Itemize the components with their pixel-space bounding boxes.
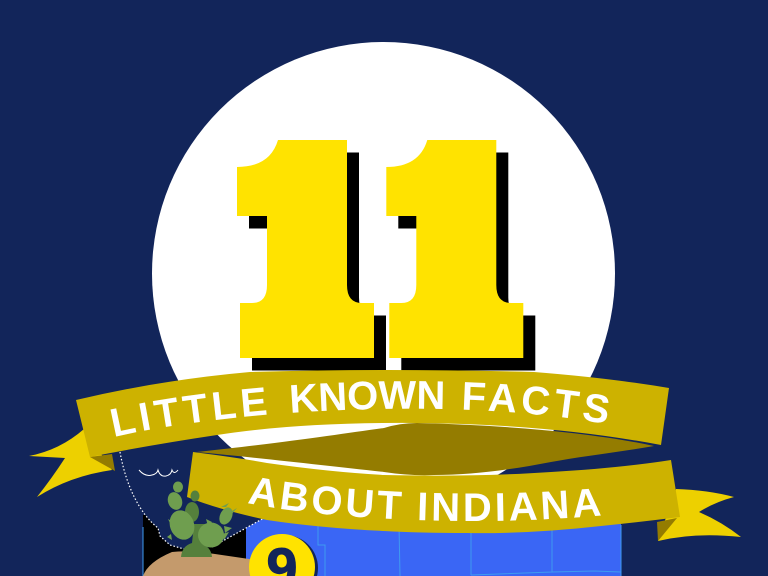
white circle xyxy=(152,42,615,505)
dark ribbon fold between banners xyxy=(197,423,654,475)
banner heading: LITTLE xyxy=(110,387,267,436)
tail shape xyxy=(658,489,741,541)
water waves xyxy=(139,470,178,476)
banner heading xyxy=(248,478,601,521)
first digit 1 shadow xyxy=(249,152,386,370)
second digit 1 xyxy=(386,140,523,358)
first digit 1 xyxy=(237,140,374,358)
map blue fill xyxy=(246,500,621,576)
cactus pad upper right xyxy=(217,505,235,527)
lake navy area xyxy=(120,440,264,549)
cactus spines xyxy=(167,497,237,540)
tail fold xyxy=(657,518,677,541)
dotted shoreline xyxy=(120,452,264,549)
cactus trunk and base xyxy=(181,524,212,557)
banner heading: INDIANA xyxy=(419,488,601,521)
cactus pad upper centre xyxy=(185,502,199,522)
black map region xyxy=(143,515,246,576)
tail fold xyxy=(90,454,115,471)
icon: cactus xyxy=(165,482,237,557)
banner heading: FACTS xyxy=(464,382,608,423)
bottom banner xyxy=(187,452,680,534)
tan hill xyxy=(143,551,262,576)
number badge 9 xyxy=(249,534,318,576)
map county lines xyxy=(143,525,621,576)
big number 11 xyxy=(237,140,535,370)
tail shape xyxy=(29,429,112,497)
map of Indiana xyxy=(120,440,621,576)
banner heading: ABOUT xyxy=(248,478,402,519)
banner shape xyxy=(187,452,680,533)
right ribbon tail xyxy=(657,489,741,541)
badge circle xyxy=(249,534,315,576)
top banner xyxy=(76,370,669,457)
cactus pad right xyxy=(198,522,224,548)
badge shadow xyxy=(252,535,318,576)
cactus pad left xyxy=(166,507,198,543)
banner shape xyxy=(76,370,669,457)
second digit 1 shadow xyxy=(398,152,535,370)
banner heading xyxy=(110,381,608,436)
cactus bud centre xyxy=(190,490,200,502)
banner heading: KNOWN xyxy=(291,381,443,413)
left ribbon tail xyxy=(29,429,115,497)
cactus bud left xyxy=(173,482,183,492)
cactus pad upper left xyxy=(165,490,185,512)
